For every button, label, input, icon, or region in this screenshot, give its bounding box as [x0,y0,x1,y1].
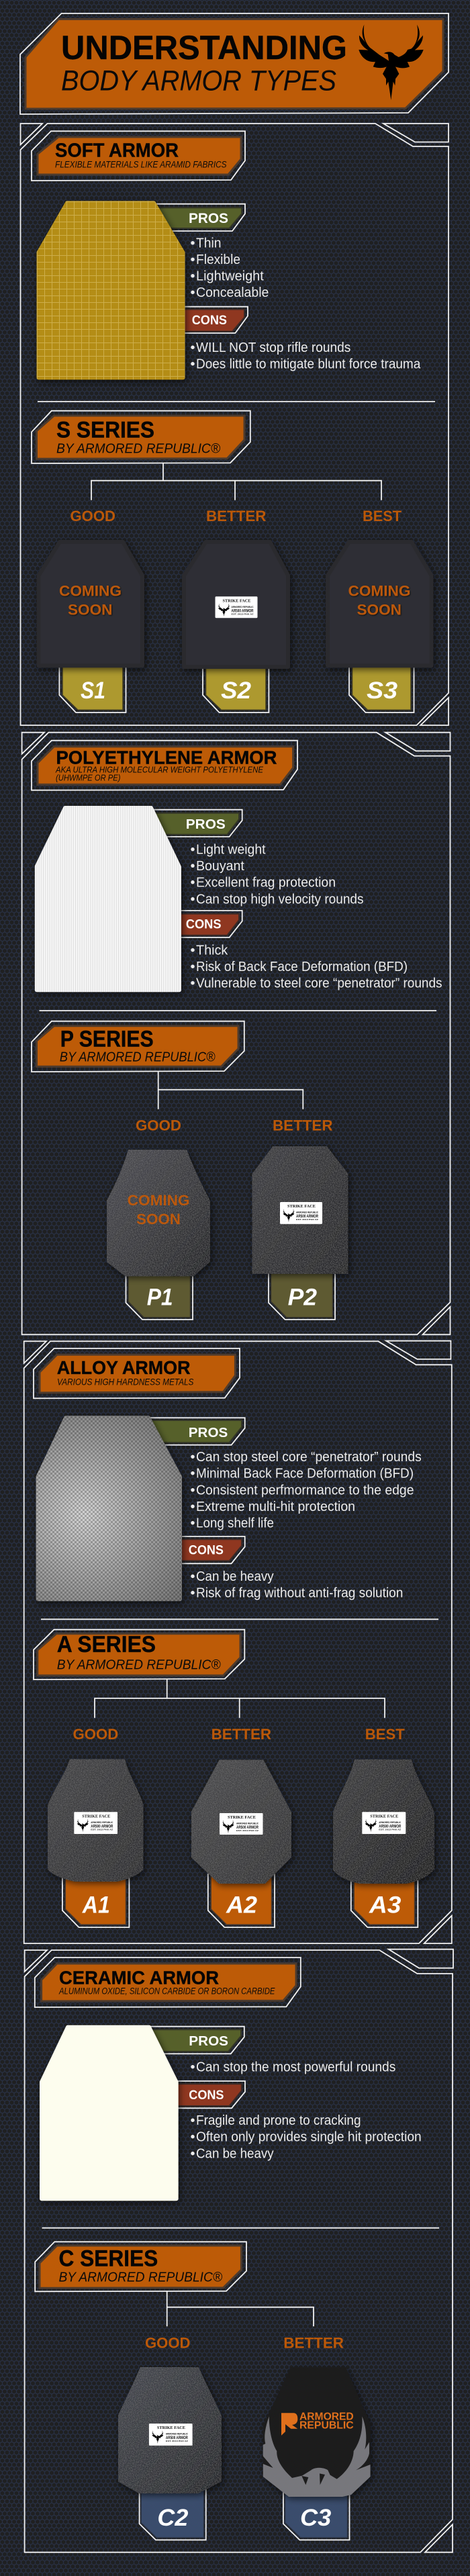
label: S2 strike face: ARMORED REPUBLIC [231,605,254,608]
connector: C series tree [167,2291,314,2326]
label: C2 strike face: ARMORED REPUBLIC [166,2432,188,2435]
pros tag: PROS [189,211,228,226]
rating labels: GOOD [145,2335,191,2352]
rating labels: BETTER [206,508,267,524]
tag: S3: S3 [367,678,398,704]
label: C2 strike face [149,2424,193,2446]
cons list: Risk of frag without anti-frag solution [196,1586,403,1601]
rating labels [73,1726,405,1743]
heading: soft armor: SOFT ARMOR [55,140,179,161]
label: A1 strike face: EST. 2013 PHX AZ [91,1828,113,1831]
cons list: • [191,960,195,974]
label: P2 strike face: ARMORED REPUBLIC [296,1210,318,1214]
tag: S2 [203,661,269,712]
heading: ceramic armor: CERAMIC ARMOR [59,1967,219,1988]
pros tag [144,2027,244,2054]
heading: alloy armor: VARIOUS HIGH HARDNESS METALS [57,1377,193,1387]
tag: S1: S1 [81,678,105,704]
label: P2 strike face: AR500 ARMOR [296,1215,319,1219]
label: S2 strike face [215,596,258,618]
tag: S3 [349,661,414,712]
pros list: • [191,1516,195,1531]
heading: C series: BY ARMORED REPUBLIC® [59,2269,223,2285]
heading: S series: S SERIES [56,418,154,443]
heading: polyethylene armor [32,741,297,790]
pros list: Flexible [196,252,240,267]
heading: ceramic armor: ALUMINUM OXIDE, SILICON CARBIDE OR BORON CARBIDE [58,1986,275,1996]
pros tag [149,1418,245,1445]
pros list: • [191,285,195,300]
cons list [191,340,421,371]
heading: P series [32,1021,244,1072]
pros tag: PROS [189,1425,228,1440]
cons list: Often only provides single hit protection [196,2130,422,2145]
heading: polyethylene armor: AKA ULTRA HIGH MOLECULAR WEIGHT POLYETHYLENE [55,764,263,774]
plate: A2 [191,1760,291,1884]
rating labels: BETTER [273,1117,333,1134]
cons list [191,1569,403,1601]
plate: S3 [328,542,431,665]
panel frame [22,733,451,1334]
cons list: Vulnerable to steel core “penetrator” rounds [196,976,442,991]
cons list: • [191,1586,195,1601]
plate: P1 [107,1150,210,1276]
connector: S series tree [91,463,381,500]
rating labels: GOOD [136,1117,181,1134]
heading: C series [35,2242,246,2291]
cons tag [176,1536,245,1563]
pros list: Consistent perfmormance to the edge [196,1483,414,1498]
heading: polyethylene armor: POLYETHYLENE ARMOR [56,747,277,768]
heading: soft armor: FLEXIBLE MATERIALS LIKE ARAMID FABRICS [55,160,227,169]
cons list [191,2113,422,2161]
tag: A2: A2 [226,1892,258,1918]
pros tag [149,810,242,837]
heading: A series: A SERIES [57,1632,156,1657]
pros tag: PROS [189,2033,228,2049]
pros list [191,1450,422,1531]
tag: A3: A3 [369,1892,402,1918]
panel: alloy armor and A series [24,1341,452,1943]
pros list: • [191,1450,195,1465]
cons list [191,944,442,991]
rating labels [136,1117,333,1134]
rating labels: BETTER [211,1726,271,1743]
armor plate: ceramic [42,2027,177,2199]
cons list: • [191,340,195,355]
label: P2 strike face [280,1202,322,1224]
plate: S1 [39,542,142,665]
label: A3 strike face: AR500 ARMOR [379,1825,402,1829]
pros list: Bouyant [196,859,244,874]
cons list: Can be heavy [196,2146,274,2161]
connector: P series tree [158,1072,303,1109]
plate: P2 [252,1146,348,1274]
pros list: Extreme multi-hit protection [196,1500,355,1514]
cons list: • [191,2130,195,2145]
cons tag: CONS [189,2088,224,2103]
heading: soft armor [32,131,245,181]
pros list [191,843,364,907]
pros list [191,236,269,300]
label: P2 strike face: EST. 2013 PHX AZ [296,1218,318,1221]
pros list: Thin [196,236,222,251]
pros list: Concealable [196,285,269,300]
tag: S1 [59,661,126,712]
label: A2 strike face: STRIKE FACE [228,1815,256,1820]
label: S2 strike face: STRIKE FACE [223,598,251,603]
tag: C3: C3 [300,2505,332,2531]
cons list: • [191,2146,195,2161]
panel: ceramic armor and C series [25,1949,453,2552]
rating labels: BEST [365,1726,405,1743]
pros tag [151,204,245,231]
heading: P series: P SERIES [60,1026,154,1052]
label: A2 strike face: ARMORED REPUBLIC [236,1821,258,1825]
armor plate: alloy [38,1418,180,1599]
cons tag [171,2081,245,2108]
pros list: Lightweight [196,269,264,283]
plate: S2 [184,542,288,667]
tag: P2 [269,1269,335,1320]
heading: S series [32,411,250,463]
pros list: Can stop high velocity rounds [196,892,364,907]
tag: A3 [351,1874,418,1927]
label: A1 strike face: ARMORED REPUBLIC [91,1821,113,1824]
logo: armored republic: REPUBLIC [299,2420,354,2432]
title banner [20,13,449,114]
tag: S2: S2 [221,678,252,704]
pros list: • [191,252,195,267]
armor plate: aramid soft [39,203,183,377]
cons list: • [191,1569,195,1584]
pros list: • [191,892,195,907]
rating labels: GOOD [70,508,115,524]
cons tag [178,307,248,333]
plate: C3 with phoenix print [263,2367,371,2497]
armor plate: polyethylene [37,808,179,990]
cons list: • [191,976,195,991]
rating labels: BEST [363,508,402,524]
cons tag: CONS [186,918,222,932]
heading: A series: BY ARMORED REPUBLIC® [57,1657,221,1672]
rating labels: GOOD [73,1726,118,1743]
pros list: • [191,1500,195,1514]
cons list: • [191,357,195,371]
pros list: Excellent frag protection [196,876,336,890]
cons list: Thick [196,944,228,958]
label: P2 strike face: STRIKE FACE [287,1204,316,1209]
label: A2 strike face: EST. 2013 PHX AZ [236,1829,258,1832]
plate: A3 [333,1759,434,1884]
cons tag: CONS [192,314,227,328]
panel: polyethylene armor and P series [22,733,451,1334]
pros list: Can stop the most powerful rounds [196,2060,395,2074]
label: A2 strike face: AR500 ARMOR [236,1826,259,1830]
plate: S1: SOON [68,602,112,618]
logo: armored republic: ARMORED [299,2411,354,2422]
label: A3 strike face: STRIKE FACE [370,1814,398,1819]
pros list: • [191,859,195,874]
cons list: WILL NOT stop rifle rounds [196,340,350,355]
plate: S1: COMING [59,583,122,600]
plate: S3: COMING [348,583,411,600]
phoenix print [263,2416,371,2497]
heading: alloy armor [34,1348,240,1398]
tag: A1: A1 [82,1892,110,1918]
heading: alloy armor: ALLOY ARMOR [57,1357,191,1378]
pros list: • [191,269,195,283]
cons list: Fragile and prone to cracking [196,2113,361,2128]
pros list: • [191,876,195,890]
tag: C2: C2 [157,2505,189,2531]
label: A3 strike face [362,1812,406,1834]
tag: C3 [283,2485,349,2540]
label: C2 strike face: EST. 2013 PHX AZ [166,2440,188,2442]
logo: armored republic [281,2411,354,2436]
cons list: Can be heavy [196,1569,274,1584]
plate: P1: SOON [136,1211,181,1228]
pros list: Long shelf life [196,1516,274,1531]
pros list: • [191,236,195,251]
plate: C2 [118,2367,222,2493]
connector: A series tree [95,1680,385,1718]
heading: ceramic armor [35,1958,301,2007]
panel frame [24,1341,452,1943]
label: A1 strike face: STRIKE FACE [82,1814,110,1819]
cons tag: CONS [189,1543,224,1557]
heading: A series [34,1630,244,1680]
cons list: • [191,944,195,958]
heading: S series: BY ARMORED REPUBLIC® [56,441,221,457]
tag: P1: P1 [147,1284,173,1310]
pros list: • [191,843,195,858]
heading: polyethylene armor: (UHWMPE OR PE) [56,773,121,783]
cons list: Does little to mitigate blunt force trauma [196,357,421,371]
tag: A1 [62,1874,129,1927]
label: A1 strike face: AR500 ARMOR [91,1825,113,1829]
cons list: Risk of Back Face Deformation (BFD) [196,960,408,974]
cons tag [175,911,242,937]
pros list: • [191,2060,195,2074]
plate: P1: COMING [128,1192,190,1209]
plate: S3: SOON [357,602,402,618]
panel frame [25,1949,453,2552]
pros list: Minimal Back Face Deformation (BFD) [196,1466,414,1481]
panel: soft armor and S series [20,124,449,725]
tag: A2 [208,1874,275,1927]
heading: C series: C SERIES [59,2246,158,2271]
title: understanding: UNDERSTANDING [61,29,347,66]
label: A1 strike face [74,1812,117,1834]
pros tag: PROS [186,817,226,832]
rating labels: BETTER [283,2335,344,2352]
label: C2 strike face: STRIKE FACE [157,2426,185,2430]
label: A3 strike face: ARMORED REPUBLIC [379,1821,401,1824]
plate: A1 [48,1759,144,1882]
rating labels [70,508,402,524]
pros list: • [191,1483,195,1498]
panel frame [20,124,449,725]
label: S2 strike face: EST. 2013 PHX AZ [231,612,254,615]
rating labels [145,2335,344,2352]
tag: P2: P2 [288,1284,318,1310]
tag: P1 [126,1269,193,1320]
tag: C2 [140,2485,206,2540]
pros list: Light weight [196,843,266,858]
pros list: Can stop steel core “penetrator” rounds [196,1450,422,1465]
label: A2 strike face [220,1813,263,1835]
cons list: • [191,2113,195,2128]
label: C2 strike face: AR500 ARMOR [166,2436,188,2440]
label: A3 strike face: EST. 2013 PHX AZ [379,1828,402,1831]
pros list: • [191,1466,195,1481]
heading: P series: BY ARMORED REPUBLIC® [60,1049,216,1064]
icon: phoenix logo [359,25,424,100]
label: S2 strike face: AR500 ARMOR [231,609,254,613]
subtitle: body armor types: BODY ARMOR TYPES [61,64,336,97]
